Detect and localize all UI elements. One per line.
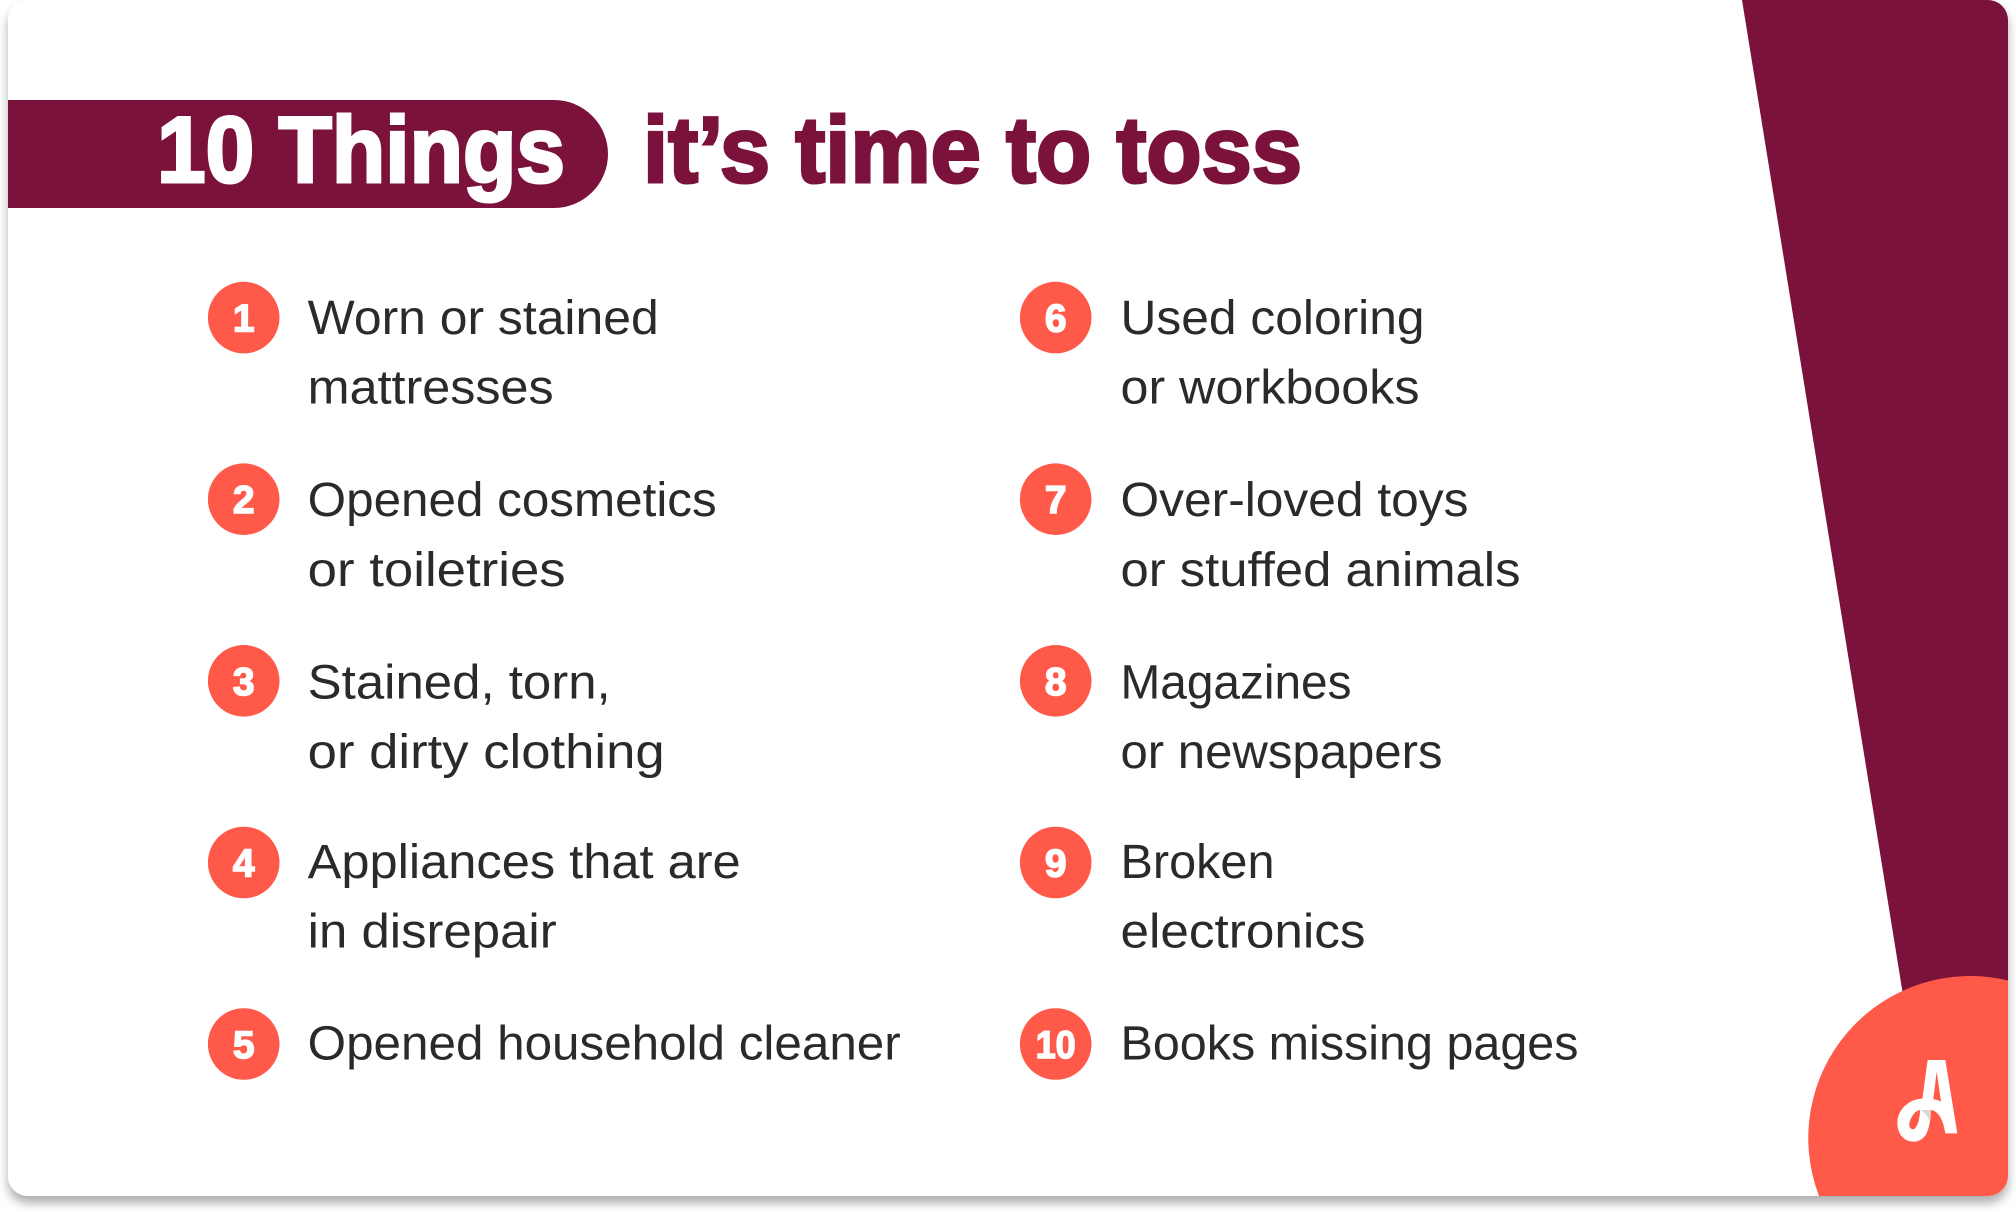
item 3: Stained, torn, (308, 656, 611, 710)
item 9: Broken (1120, 836, 1274, 889)
item 9 (1020, 827, 1366, 958)
item 9: electronics (1120, 906, 1366, 958)
item 2: Opened cosmetics (308, 474, 717, 527)
item 9: 9 (1045, 842, 1067, 886)
item 3: 3 (233, 661, 255, 704)
item 1: Worn or stained (308, 292, 659, 345)
item 7: or stuffed animals (1120, 544, 1520, 597)
item 8 (1020, 645, 1442, 779)
item 1 (208, 282, 659, 414)
item 6: or workbooks (1120, 362, 1420, 414)
item 4: Appliances that are (308, 836, 741, 889)
item 5: 5 (233, 1024, 255, 1067)
item 1: 1 (233, 298, 255, 341)
title banner: 10 Things (157, 97, 565, 202)
item 4 (208, 827, 741, 958)
item 4: 4 (233, 842, 255, 886)
item 3 (208, 645, 665, 779)
item 10 (1020, 1008, 1578, 1080)
item 8: or newspapers (1120, 726, 1442, 779)
decorative maroon panel (1742, 0, 2008, 1100)
item 6: Used coloring (1120, 292, 1424, 345)
item 3: or dirty clothing (308, 726, 665, 779)
item 2: or toiletries (308, 544, 566, 597)
item 4: in disrepair (308, 906, 557, 958)
coral logo circle (1808, 976, 2008, 1196)
title continuation: it’s time to toss (643, 97, 1302, 202)
item 10: 10 (1036, 1024, 1076, 1067)
item 7 (1020, 463, 1520, 597)
item 7: 7 (1045, 479, 1067, 522)
item 10: Books missing pages (1120, 1018, 1578, 1070)
icon: logo letter A (1897, 1060, 1957, 1142)
title banner (8, 97, 608, 208)
item 6: 6 (1045, 298, 1067, 341)
item 7: Over-loved toys (1120, 474, 1468, 527)
item 1: mattresses (308, 362, 554, 414)
item 5 (208, 1008, 901, 1080)
item 8: 8 (1045, 661, 1067, 704)
item 5: Opened household cleaner (308, 1018, 901, 1070)
item 8: Magazines (1120, 656, 1352, 710)
item 6 (1020, 282, 1424, 414)
item 2 (208, 463, 717, 597)
item 2: 2 (233, 479, 255, 522)
